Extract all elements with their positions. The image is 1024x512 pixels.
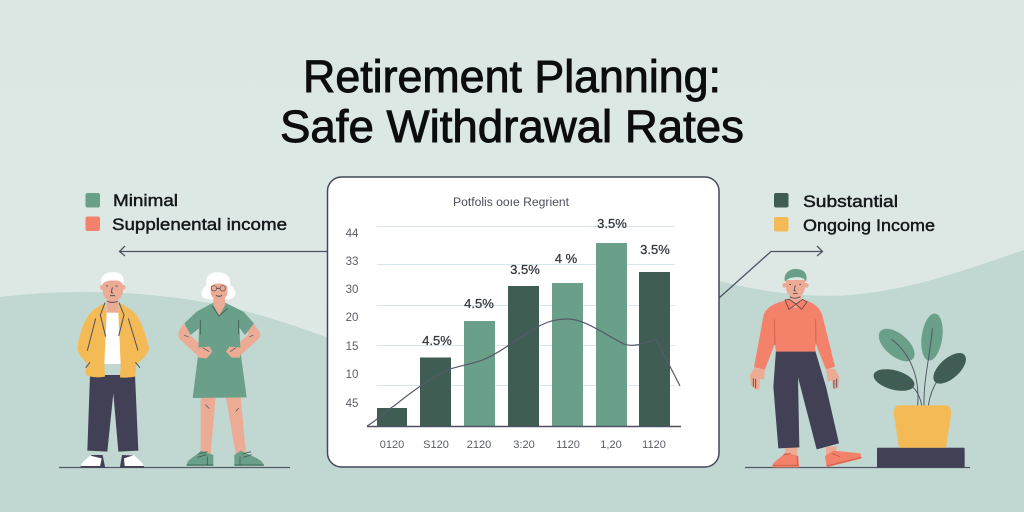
x axis labels: 1120	[642, 439, 666, 451]
value labels: 3.5%	[640, 242, 670, 257]
legend: left: Supplenental income	[112, 215, 287, 234]
y axis labels: 44	[346, 228, 359, 240]
x axis labels: 3:20	[513, 439, 535, 451]
value labels: 3.5%	[510, 262, 540, 277]
stems	[891, 328, 953, 405]
person: woman in green dress	[183, 272, 264, 466]
ground line: left	[59, 466, 290, 468]
y axis labels: 45	[346, 398, 358, 410]
y axis labels: 30	[346, 284, 358, 296]
value labels: 4.5%	[464, 296, 494, 311]
trend line	[367, 319, 680, 426]
x axis	[367, 426, 681, 428]
person: man in yellow jacket	[77, 272, 149, 468]
x axis labels: 1,20	[600, 439, 622, 451]
legend: right: Substantial	[803, 192, 898, 211]
y axis labels: 10	[346, 369, 358, 381]
x axis labels	[380, 439, 666, 451]
grid lines	[377, 226, 675, 386]
arrow: right	[719, 246, 822, 298]
potted plant	[871, 312, 971, 468]
y axis labels: 20	[346, 312, 358, 324]
x axis labels: 2120	[467, 439, 491, 451]
legend: right	[774, 192, 935, 235]
value labels: 4.5%	[422, 333, 452, 348]
title: Safe Withdrawal Rates	[280, 101, 744, 152]
value labels	[422, 216, 670, 348]
background hills	[0, 250, 1024, 512]
legend: right: Ongoing Income	[803, 216, 935, 235]
panel card	[328, 177, 719, 467]
x axis labels: 0120	[380, 439, 404, 451]
plinth	[877, 448, 965, 468]
value labels: 3.5%	[597, 216, 627, 231]
title	[280, 51, 744, 152]
ground line: right	[745, 466, 970, 468]
leaves	[873, 323, 920, 367]
legend: left	[86, 191, 287, 234]
chart title: Potfolis ooıe Regrient	[453, 197, 570, 209]
arrow: left	[120, 246, 327, 256]
x axis labels: S120	[423, 439, 449, 451]
bars	[377, 243, 670, 426]
y axis labels	[346, 228, 359, 410]
x axis labels: 1120	[556, 439, 580, 451]
y axis labels: 15	[346, 341, 358, 353]
title: Retirement Planning:	[303, 51, 721, 102]
person: man in coral shirt	[750, 269, 861, 467]
legend: left: Minimal	[113, 191, 178, 210]
value labels: 4 %	[555, 251, 578, 266]
y axis labels: 33	[346, 256, 358, 268]
pot	[894, 405, 951, 448]
chart panel	[328, 177, 719, 467]
